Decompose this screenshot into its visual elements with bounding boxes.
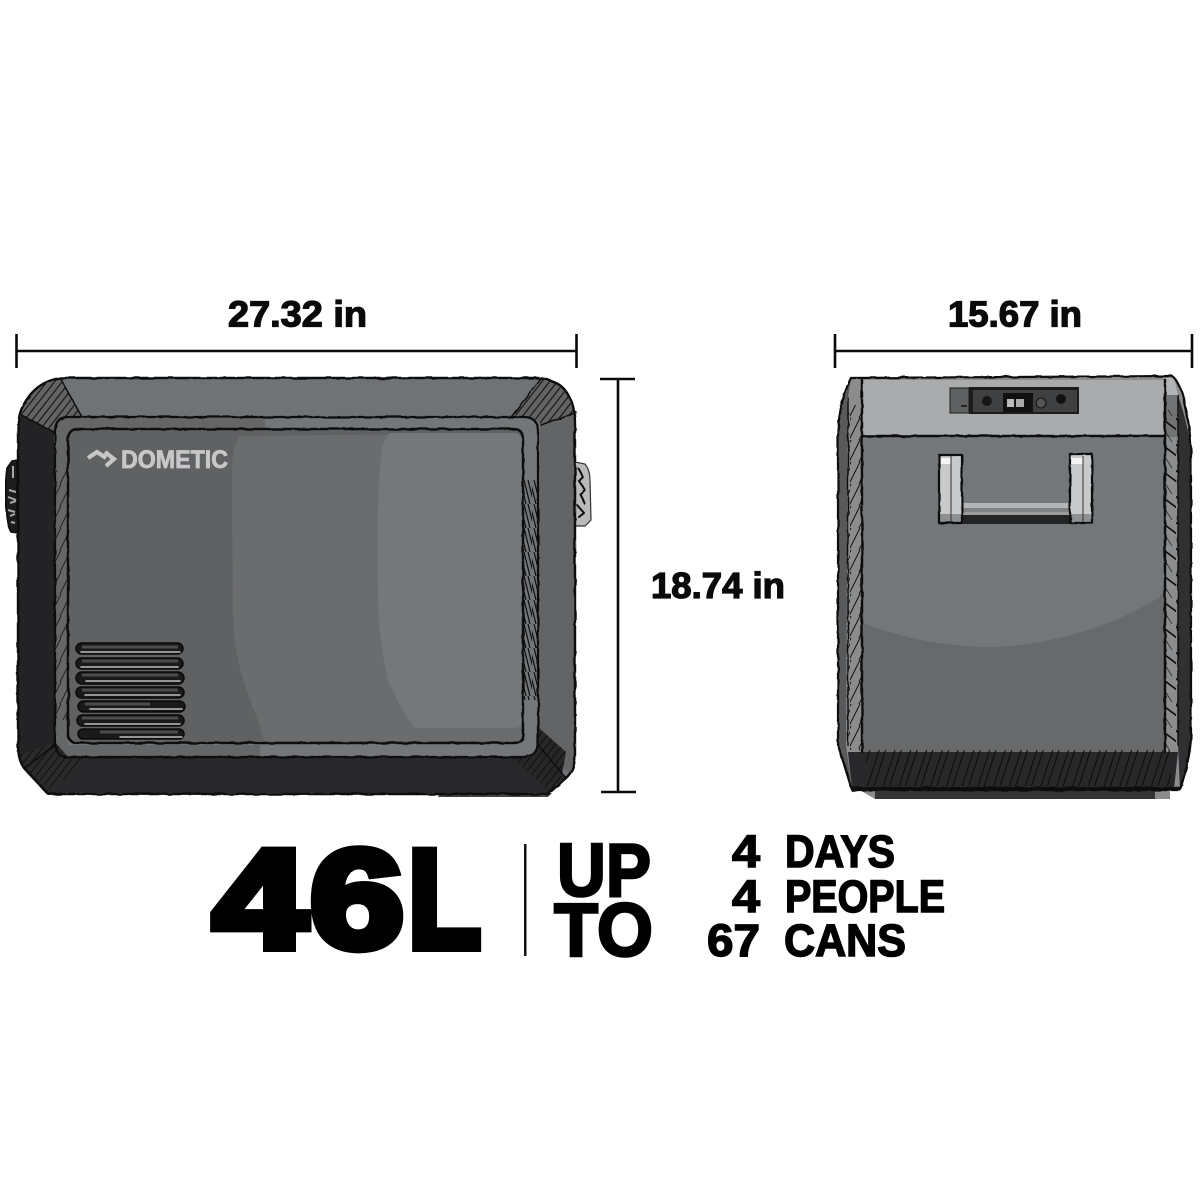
frame band (55, 418, 538, 757)
capacity counts (707, 826, 945, 966)
dimension: height (600, 379, 785, 792)
control panel (950, 387, 1079, 414)
capacity counts: 67 (707, 915, 760, 966)
right inner strip (1165, 395, 1178, 437)
height bracket line (600, 379, 636, 792)
sketch outlines (18, 378, 576, 794)
side hatching (848, 405, 862, 750)
vent grille (76, 643, 185, 739)
carry handle (939, 454, 1092, 524)
depth bracket line (835, 334, 1192, 368)
sketch outlines (838, 376, 1191, 790)
label: 27.32 in: 27.32 in (228, 294, 367, 334)
capacity counts: 4 (732, 826, 761, 877)
front face (862, 436, 1165, 752)
up to: UP (557, 828, 651, 912)
left bracket (939, 455, 962, 523)
headline: 46L: L (408, 820, 481, 978)
headline: 46L (213, 820, 481, 978)
capacity counts: DAYS (785, 826, 895, 877)
left side face (18, 415, 55, 768)
label: 15.67 in: 15.67 in (948, 294, 1082, 334)
bottom face (24, 757, 566, 793)
corner hatching (21, 379, 82, 432)
headline: 46L: 4 (213, 820, 307, 978)
lid panel: middle shade (232, 433, 522, 741)
dimension: width of front view (16, 294, 576, 368)
illustration: cooler front view (6, 378, 591, 797)
capacity counts: PEOPLE (785, 871, 945, 922)
lid panel: light shade (378, 433, 522, 728)
headline: 46L: 6 (310, 820, 404, 978)
capacity counts: 4 (732, 871, 761, 922)
dimension: depth of side view (835, 294, 1192, 368)
left handle (6, 460, 19, 533)
divider (524, 844, 526, 956)
cooler side body (838, 376, 1191, 799)
up to (554, 828, 653, 972)
up to: TO (554, 888, 653, 972)
lid panel: dark zone (68, 430, 523, 742)
width bracket line (16, 334, 576, 368)
label: 18.74 in: 18.74 in (651, 565, 785, 606)
bottom band (848, 752, 1178, 789)
right side face (538, 398, 575, 772)
frame side hatching (55, 470, 68, 720)
right handle (575, 462, 591, 526)
handle bar (962, 502, 1070, 524)
right bracket (1070, 454, 1092, 523)
logo chevrons (88, 452, 114, 466)
floor shadow (858, 789, 1170, 799)
cooler body (18, 378, 576, 797)
capacity stats (213, 820, 945, 978)
lower shade (862, 590, 1165, 752)
logo: Dometic (88, 446, 228, 474)
left outer strip (838, 378, 852, 790)
lid top face (862, 380, 1165, 435)
illustration: cooler side view (838, 376, 1191, 799)
right outer strip (1178, 395, 1191, 790)
capacity counts: CANS (784, 915, 906, 966)
logo wordmark: DOMETIC (121, 446, 228, 474)
